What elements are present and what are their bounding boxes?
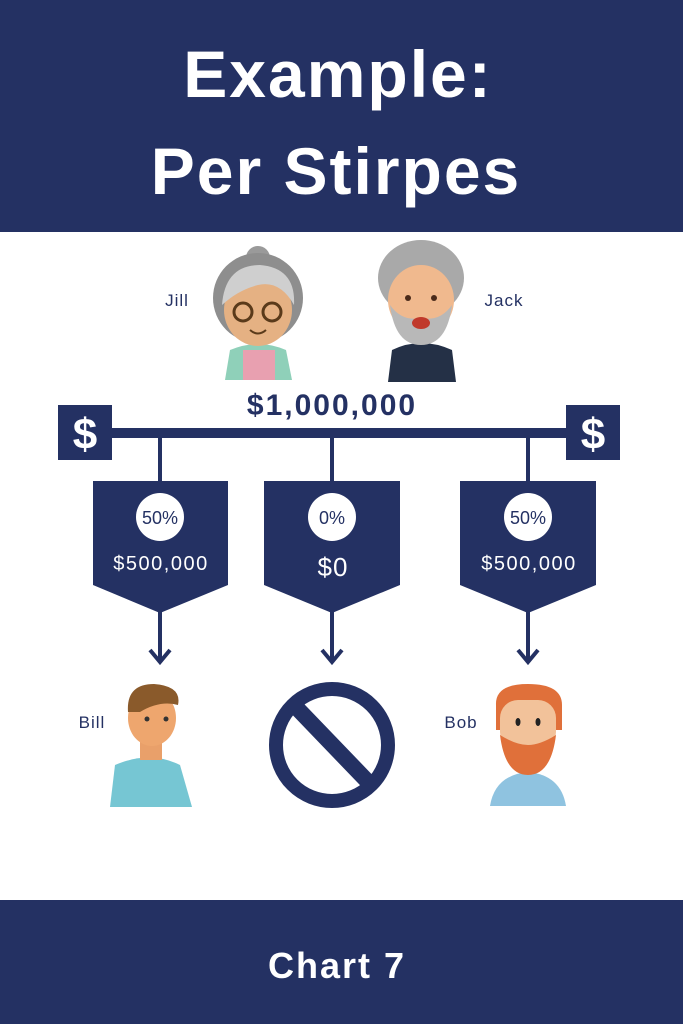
panel: Bill share [93,481,228,613]
icon: dollar box right: $ [581,410,605,459]
arrows [150,612,538,662]
icon: Jill grandmother [213,246,303,380]
label: Jack: Jack [485,291,523,310]
total amount: $1,000,000 [247,389,417,422]
icon: Bill [110,684,192,807]
label: Bill: Bill [79,713,105,732]
panel: deceased child share [264,481,400,613]
distribution tree [58,405,620,482]
title: Example: [183,37,493,111]
panel: Bob share [460,481,596,613]
label: Bob: Bob [444,713,478,732]
icon: dollar box right [566,405,620,460]
panel: deceased child share: $0 [318,552,348,582]
icon: dollar box left [58,405,112,460]
header banner [0,0,683,232]
icon: prohibited sign [276,689,388,801]
panel: deceased child share: 0% [319,508,345,528]
panel: Bill share: $500,000 [113,553,209,575]
icon: dollar box left: $ [73,410,97,459]
icon: Jack grandfather [378,240,464,382]
footer banner [0,900,683,1024]
panel: Bill share: 50% [142,508,178,528]
footer caption: Chart 7 [268,945,406,986]
panel: Bob share: $500,000 [481,553,577,575]
title [151,37,521,208]
title: Per Stirpes [151,134,521,208]
icon: Bob [490,684,566,806]
panel: Bob share: 50% [510,508,546,528]
label: Jill: Jill [165,291,189,310]
